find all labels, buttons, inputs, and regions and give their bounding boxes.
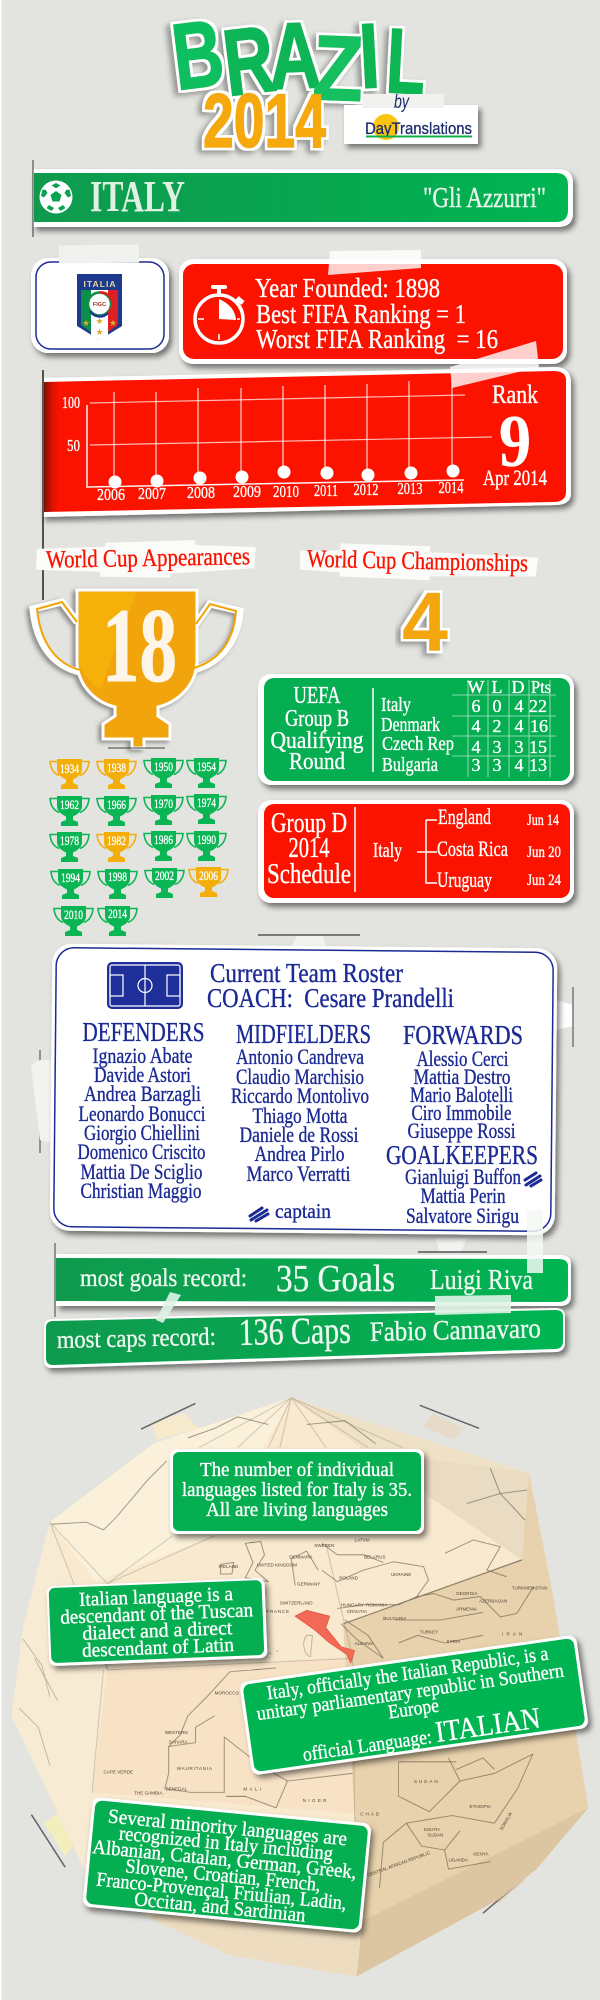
trophy 1982: 1982 <box>107 833 126 848</box>
map labels: UGANDA <box>448 1857 469 1862</box>
axis labels: 2008 <box>187 483 215 502</box>
rank callout: Rank <box>492 380 538 409</box>
table values: Pts <box>531 677 551 697</box>
trophy 2014: 2014 <box>108 906 127 921</box>
panel: crest <box>31 245 169 353</box>
callout: Italian Republic and official language: official Language: ITALIAN <box>300 1702 542 1768</box>
table values: 0 <box>492 696 502 716</box>
map labels: BELARUS <box>364 1555 386 1560</box>
team label: Italy <box>373 838 402 862</box>
callout: minority languages <box>82 1797 372 1933</box>
map labels: UKRAINE <box>391 1572 411 1577</box>
best ranking: Best FIFA Ranking = 1 <box>256 299 466 329</box>
icon: stopwatch <box>195 287 243 343</box>
trophy 1990 <box>187 831 226 861</box>
column: defenders: Andrea Barzagli <box>84 1081 201 1106</box>
map labels: POLAND <box>339 1576 359 1581</box>
map labels: ETHIOPIA <box>470 1804 492 1809</box>
column: defenders: Davide Astori <box>94 1062 191 1087</box>
table values: 3 <box>514 737 524 757</box>
panel: current team roster <box>50 944 557 1235</box>
column: forwards: Giuseppe Rossi <box>408 1118 516 1143</box>
axis labels: 2007 <box>138 484 166 503</box>
roster heading: Current Team Roster <box>210 958 403 988</box>
trophy 1966: 1966 <box>107 797 126 812</box>
map labels: ARMENIA <box>456 1606 478 1611</box>
table values: 3 <box>472 755 480 775</box>
icon: Italy crest: ★ <box>95 327 104 337</box>
map labels: MALI <box>243 1787 263 1792</box>
map labels: CHAD <box>360 1811 381 1816</box>
teams: Bulgaria <box>382 754 438 776</box>
map labels: SAHARA <box>169 1739 188 1744</box>
axis labels: 2014 <box>438 478 464 497</box>
trophy 1994: 1994 <box>61 870 80 885</box>
icon: Italy crest: ITALIA <box>84 279 116 289</box>
table values: 3 <box>492 755 502 775</box>
number 18: 18 <box>102 587 177 704</box>
table values: 4 <box>472 737 480 757</box>
axis labels: 50 <box>67 436 80 455</box>
table values: D <box>512 677 524 697</box>
teams: Italy <box>381 694 411 716</box>
callout: Italian language: dialect and a direct <box>82 1617 233 1645</box>
trophy 1998: 1998 <box>108 869 127 884</box>
panel: most goals record <box>55 1243 571 1317</box>
map labels: FRANCE <box>266 1609 290 1614</box>
column: defenders: DEFENDERS <box>82 1017 204 1047</box>
panel: rank chart <box>42 341 571 600</box>
rank callout: 9 <box>499 401 531 483</box>
column: forwards: Ciro Immobile <box>412 1100 512 1125</box>
opponents and dates: Jun 14 <box>527 812 559 829</box>
column: defenders: Domenico Criscito <box>78 1139 206 1164</box>
table values: 2 <box>492 716 502 736</box>
trophy 1974 <box>187 794 226 824</box>
table values: L <box>492 677 502 697</box>
heading: World Cup Appearances: World Cup Appearances <box>46 543 250 574</box>
trophy 1962 <box>50 796 89 826</box>
column: defenders: Ignazio Abate <box>92 1043 192 1068</box>
trophy 1950 <box>144 758 183 788</box>
map labels: SENEGAL <box>166 1787 188 1792</box>
callout: minority languages: Several minority languages are <box>107 1805 348 1850</box>
map labels: IRAN <box>502 1631 525 1636</box>
small trophies: tournament appearances <box>50 758 228 936</box>
pins around roster <box>31 935 573 1252</box>
opponents and dates <box>437 804 561 892</box>
map labels: ALBANIA <box>355 1641 375 1646</box>
trophy 1950: 1950 <box>154 759 173 774</box>
trophy 1962: 1962 <box>60 797 79 812</box>
column: defenders: Leonardo Bonucci <box>78 1101 206 1126</box>
callout: Italian Republic and official language: Europe <box>387 1695 440 1724</box>
teams: Czech Rep <box>382 733 454 755</box>
trophy 1974: 1974 <box>197 795 216 810</box>
map labels: TURKMENISTAN <box>512 1585 547 1590</box>
panel title: Qualifying <box>270 728 364 754</box>
trophy 1986 <box>144 831 183 861</box>
callout: Italian Republic and official language: unitary parliamentary republic in Southern <box>255 1660 565 1725</box>
header bar: Italy <box>33 160 573 237</box>
callout: minority languages: Franco-Provençal, Friulian, Ladin, <box>95 1869 347 1915</box>
map labels: HUNGARY <box>341 1603 364 1608</box>
map labels: MAURITANIA <box>177 1766 213 1771</box>
column: midfielders: Antonio Candreva <box>236 1044 364 1069</box>
label: most caps record: <box>57 1324 216 1354</box>
column: midfielders: Daniele de Rossi <box>240 1122 358 1147</box>
icon: football pitch <box>107 962 183 1009</box>
map labels: WESTERN <box>165 1730 188 1735</box>
map labels: GEORGIA <box>456 1591 478 1596</box>
map labels: CENTRAL AFRICAN REPUBLIC <box>367 1850 431 1878</box>
rank callout: Apr 2014 <box>483 465 547 490</box>
captain legend <box>250 1199 331 1223</box>
trophy 1978 <box>50 832 89 862</box>
map labels: LATVIA <box>355 1537 371 1542</box>
title: Brazil 2014: B <box>167 0 229 110</box>
axis labels: 2009 <box>233 482 261 501</box>
opponents and dates: Jun 24 <box>527 872 561 889</box>
trophy 1966 <box>97 796 136 826</box>
table values: 3 <box>492 737 502 757</box>
callout: Italian language <box>47 1578 267 1666</box>
line chart <box>87 380 492 487</box>
panel: Group D schedule <box>258 800 574 903</box>
panel title <box>267 808 351 890</box>
axis labels: 2012 <box>354 480 378 499</box>
data points <box>108 464 460 488</box>
column: midfielders: MIDFIELDERS <box>236 1019 371 1049</box>
map labels: BULGARIA <box>383 1616 407 1621</box>
map labels: MOROCCO <box>215 1691 240 1696</box>
icon: Italy crest: FIGC <box>93 302 106 308</box>
map labels: SWEDEN <box>314 1543 334 1548</box>
map labels: TURKEY <box>420 1629 438 1634</box>
map labels: SOUTH <box>424 1827 440 1832</box>
column: defenders: Giorgio Chiellini <box>84 1120 200 1145</box>
axis labels <box>62 393 464 504</box>
column: midfielders: Marco Verratti <box>246 1161 350 1186</box>
map labels: UNITED KINGDOM <box>257 1562 297 1567</box>
trophy 1982 <box>97 832 136 862</box>
Italy highlight <box>295 1610 355 1663</box>
callout: Italian language: Italian language is a <box>79 1583 233 1611</box>
table values: 6 <box>472 696 480 716</box>
logo: by Day Translations <box>344 92 478 144</box>
axis labels: 100 <box>62 393 80 412</box>
column: midfielders <box>231 1019 371 1186</box>
map labels: DENMARK <box>289 1555 312 1560</box>
trophy 1978: 1978 <box>60 833 79 848</box>
panel: founded and FIFA rankings <box>179 250 567 364</box>
table values: 13 <box>529 755 547 775</box>
column: midfielders: Thiago Motta <box>252 1103 348 1128</box>
map labels: IRELAND <box>218 1564 239 1569</box>
map labels: SWITZERLAND <box>280 1601 313 1606</box>
title: Brazil 2014 <box>167 0 428 164</box>
teams: Denmark <box>381 714 440 736</box>
callout: number of languages <box>170 1449 424 1534</box>
panel title: Group D <box>271 808 347 839</box>
column: forwards: Mattia Destro <box>414 1064 510 1089</box>
roster heading: COACH: Cesare Prandelli <box>207 983 454 1013</box>
callout: Italian Republic and official language <box>239 1635 589 1775</box>
column: forwards <box>403 1020 523 1143</box>
trophy 2006: 2006 <box>199 868 218 883</box>
opponents and dates: Costa Rica <box>437 836 508 861</box>
trophy 1970 <box>144 795 183 825</box>
panel title: 2014 <box>288 833 330 864</box>
big number: 4 championships: 4 <box>402 575 448 669</box>
roster heading <box>207 958 454 1013</box>
founded line: Year Founded: 1898 <box>255 273 440 303</box>
callout: Italian language: descendant of the Tuscan <box>60 1599 254 1629</box>
opponents and dates: Jun 20 <box>527 844 561 861</box>
title: Brazil 2014: R <box>218 6 280 116</box>
table grid <box>452 680 556 777</box>
column: defenders: Mattia De Sciglio <box>80 1159 202 1184</box>
map labels: AZERBAIJAN <box>479 1599 507 1604</box>
callout: Italian Republic and official language: Italy, officially the Italian Republic, is a <box>265 1643 550 1704</box>
table values: W <box>468 677 484 697</box>
trophy 2002 <box>145 868 184 898</box>
trophy 2014 <box>98 906 137 936</box>
column: defenders <box>78 1017 206 1203</box>
map labels: SYRIA <box>447 1639 461 1644</box>
value: 136 Caps <box>238 1310 351 1354</box>
heading: World Cup Championships: World Cup Championships <box>307 546 528 577</box>
pins <box>31 1403 537 1913</box>
value: 35 Goals <box>276 1258 395 1300</box>
panel title: UEFA <box>294 683 341 709</box>
column: goalkeepers <box>386 1140 538 1228</box>
heading: World Cup Championships <box>300 543 538 583</box>
column: goalkeepers: GOALKEEPERS <box>386 1140 538 1170</box>
column: forwards: Mario Balotelli <box>410 1082 513 1107</box>
trophy 1986: 1986 <box>154 832 173 847</box>
trophy 1938: 1938 <box>107 760 126 775</box>
axis labels: 2006 <box>97 485 125 504</box>
map labels: SOMALIA <box>499 1810 514 1831</box>
column: goalkeepers: Mattia Perin <box>420 1183 506 1208</box>
callout: number of languages: All are living languages <box>206 1499 388 1521</box>
table values <box>468 677 551 775</box>
axis labels: 2010 <box>273 482 299 501</box>
icon: Italy crest: ★ <box>95 316 104 326</box>
title: Brazil 2014: 2014 <box>203 79 326 164</box>
globe facets <box>11 1398 588 1976</box>
panel: UEFA qualifying table <box>258 674 574 785</box>
icon: big trophy with 18 appearances <box>33 587 240 748</box>
logo: by Day Translations: DayTranslations <box>365 119 472 138</box>
opponents and dates: Uruguay <box>437 867 492 892</box>
trophy 1954: 1954 <box>197 759 216 774</box>
label: most goals record: <box>80 1265 247 1292</box>
table values: 16 <box>530 716 548 736</box>
map labels <box>103 1537 547 1878</box>
player: Fabio Cannavaro <box>369 1313 541 1348</box>
table values: 4 <box>514 716 524 736</box>
trophy 2006 <box>189 867 228 897</box>
tape strips <box>156 1210 543 1323</box>
panel title: Schedule <box>267 859 351 890</box>
callout: minority languages: Slovene, Croatian, French, <box>124 1855 322 1896</box>
worst ranking: Worst FIFA Ranking = 16 <box>256 324 498 354</box>
captain legend: captain <box>275 1199 331 1223</box>
heading: World Cup Appearances <box>36 539 256 580</box>
column: goalkeepers: Salvatore Sirigu <box>406 1203 519 1228</box>
nickname: "Gli Azzurri" <box>423 182 546 214</box>
map labels: SUDAN <box>414 1779 440 1784</box>
icon: Italy crest <box>77 274 122 340</box>
trophy 2010 <box>54 906 93 936</box>
title: Brazil 2014: L <box>384 10 428 114</box>
callout: minority languages: Albanian, Catalan, German, Greek, <box>92 1836 357 1883</box>
axis labels: 2013 <box>398 479 422 498</box>
callout: number of languages: languages listed for Italy is 35. <box>182 1479 412 1501</box>
column: forwards: FORWARDS <box>403 1020 523 1050</box>
table values: 22 <box>529 696 547 716</box>
map borders <box>19 1398 534 1921</box>
callout: Italian language: descendant of Latin <box>82 1634 234 1662</box>
player: Luigi Riva <box>430 1265 533 1296</box>
bracket <box>417 820 437 883</box>
icon: captain mark <box>525 1173 541 1186</box>
table values: 15 <box>529 737 547 757</box>
table values: 4 <box>472 716 480 736</box>
opponents and dates: England <box>438 804 491 829</box>
map globe <box>11 1398 588 1976</box>
map labels: SUDAN <box>427 1833 443 1838</box>
column: midfielders: Andrea Pirlo <box>254 1141 344 1166</box>
map labels: GERMANY <box>297 1581 320 1586</box>
trophy 1990: 1990 <box>197 832 216 847</box>
panel title: Round <box>289 749 345 775</box>
callout: minority languages: recognized in Italy including <box>118 1823 334 1865</box>
team name: ITALY <box>90 172 185 221</box>
table values: 4 <box>514 755 524 775</box>
trophy 1934 <box>50 759 89 789</box>
callout: number of languages: The number of individual <box>200 1459 394 1481</box>
teams <box>381 694 454 776</box>
column: midfielders: Riccardo Montolivo <box>231 1083 369 1108</box>
rank callout <box>483 380 547 490</box>
map labels: CROATIA <box>347 1609 368 1614</box>
logo: by Day Translations: by <box>394 92 410 113</box>
icon: Italy crest: ★ <box>82 318 90 328</box>
column: forwards: Alessio Cerci <box>416 1046 508 1071</box>
panel: most caps record <box>44 1308 565 1368</box>
trophy 2002: 2002 <box>155 868 174 883</box>
panel title <box>270 683 364 775</box>
trophy 1934: 1934 <box>60 761 79 776</box>
map labels: NIGER <box>303 1798 329 1803</box>
title: Brazil 2014: I <box>357 5 382 108</box>
panel title: Group B <box>285 706 349 732</box>
table values: 4 <box>514 696 524 716</box>
trophy 1938 <box>97 759 136 789</box>
trophy 2010: 2010 <box>64 907 83 922</box>
title: Brazil 2014: A <box>267 2 323 109</box>
map labels: ROMANIA <box>366 1603 388 1608</box>
trophy 1970: 1970 <box>154 796 173 811</box>
icon: soccer ball <box>40 180 72 214</box>
map labels: CAPE VERDE <box>103 1769 133 1774</box>
column: midfielders: Claudio Marchisio <box>236 1064 364 1089</box>
axis labels: 2011 <box>314 481 338 500</box>
map labels: THE GAMBIA <box>134 1790 163 1795</box>
title: Brazil 2014: Z <box>311 17 365 121</box>
column: goalkeepers: Gianluigi Buffon <box>405 1164 521 1189</box>
trophy 1994 <box>51 869 90 899</box>
trophy 1954 <box>187 758 226 788</box>
trophy 1998 <box>98 869 137 899</box>
callout: minority languages: Occitan, and Sardinian <box>133 1888 307 1927</box>
map labels: KENYA <box>473 1852 490 1857</box>
column: defenders: Christian Maggio <box>80 1178 202 1203</box>
icon: Italy crest: ★ <box>109 318 117 328</box>
